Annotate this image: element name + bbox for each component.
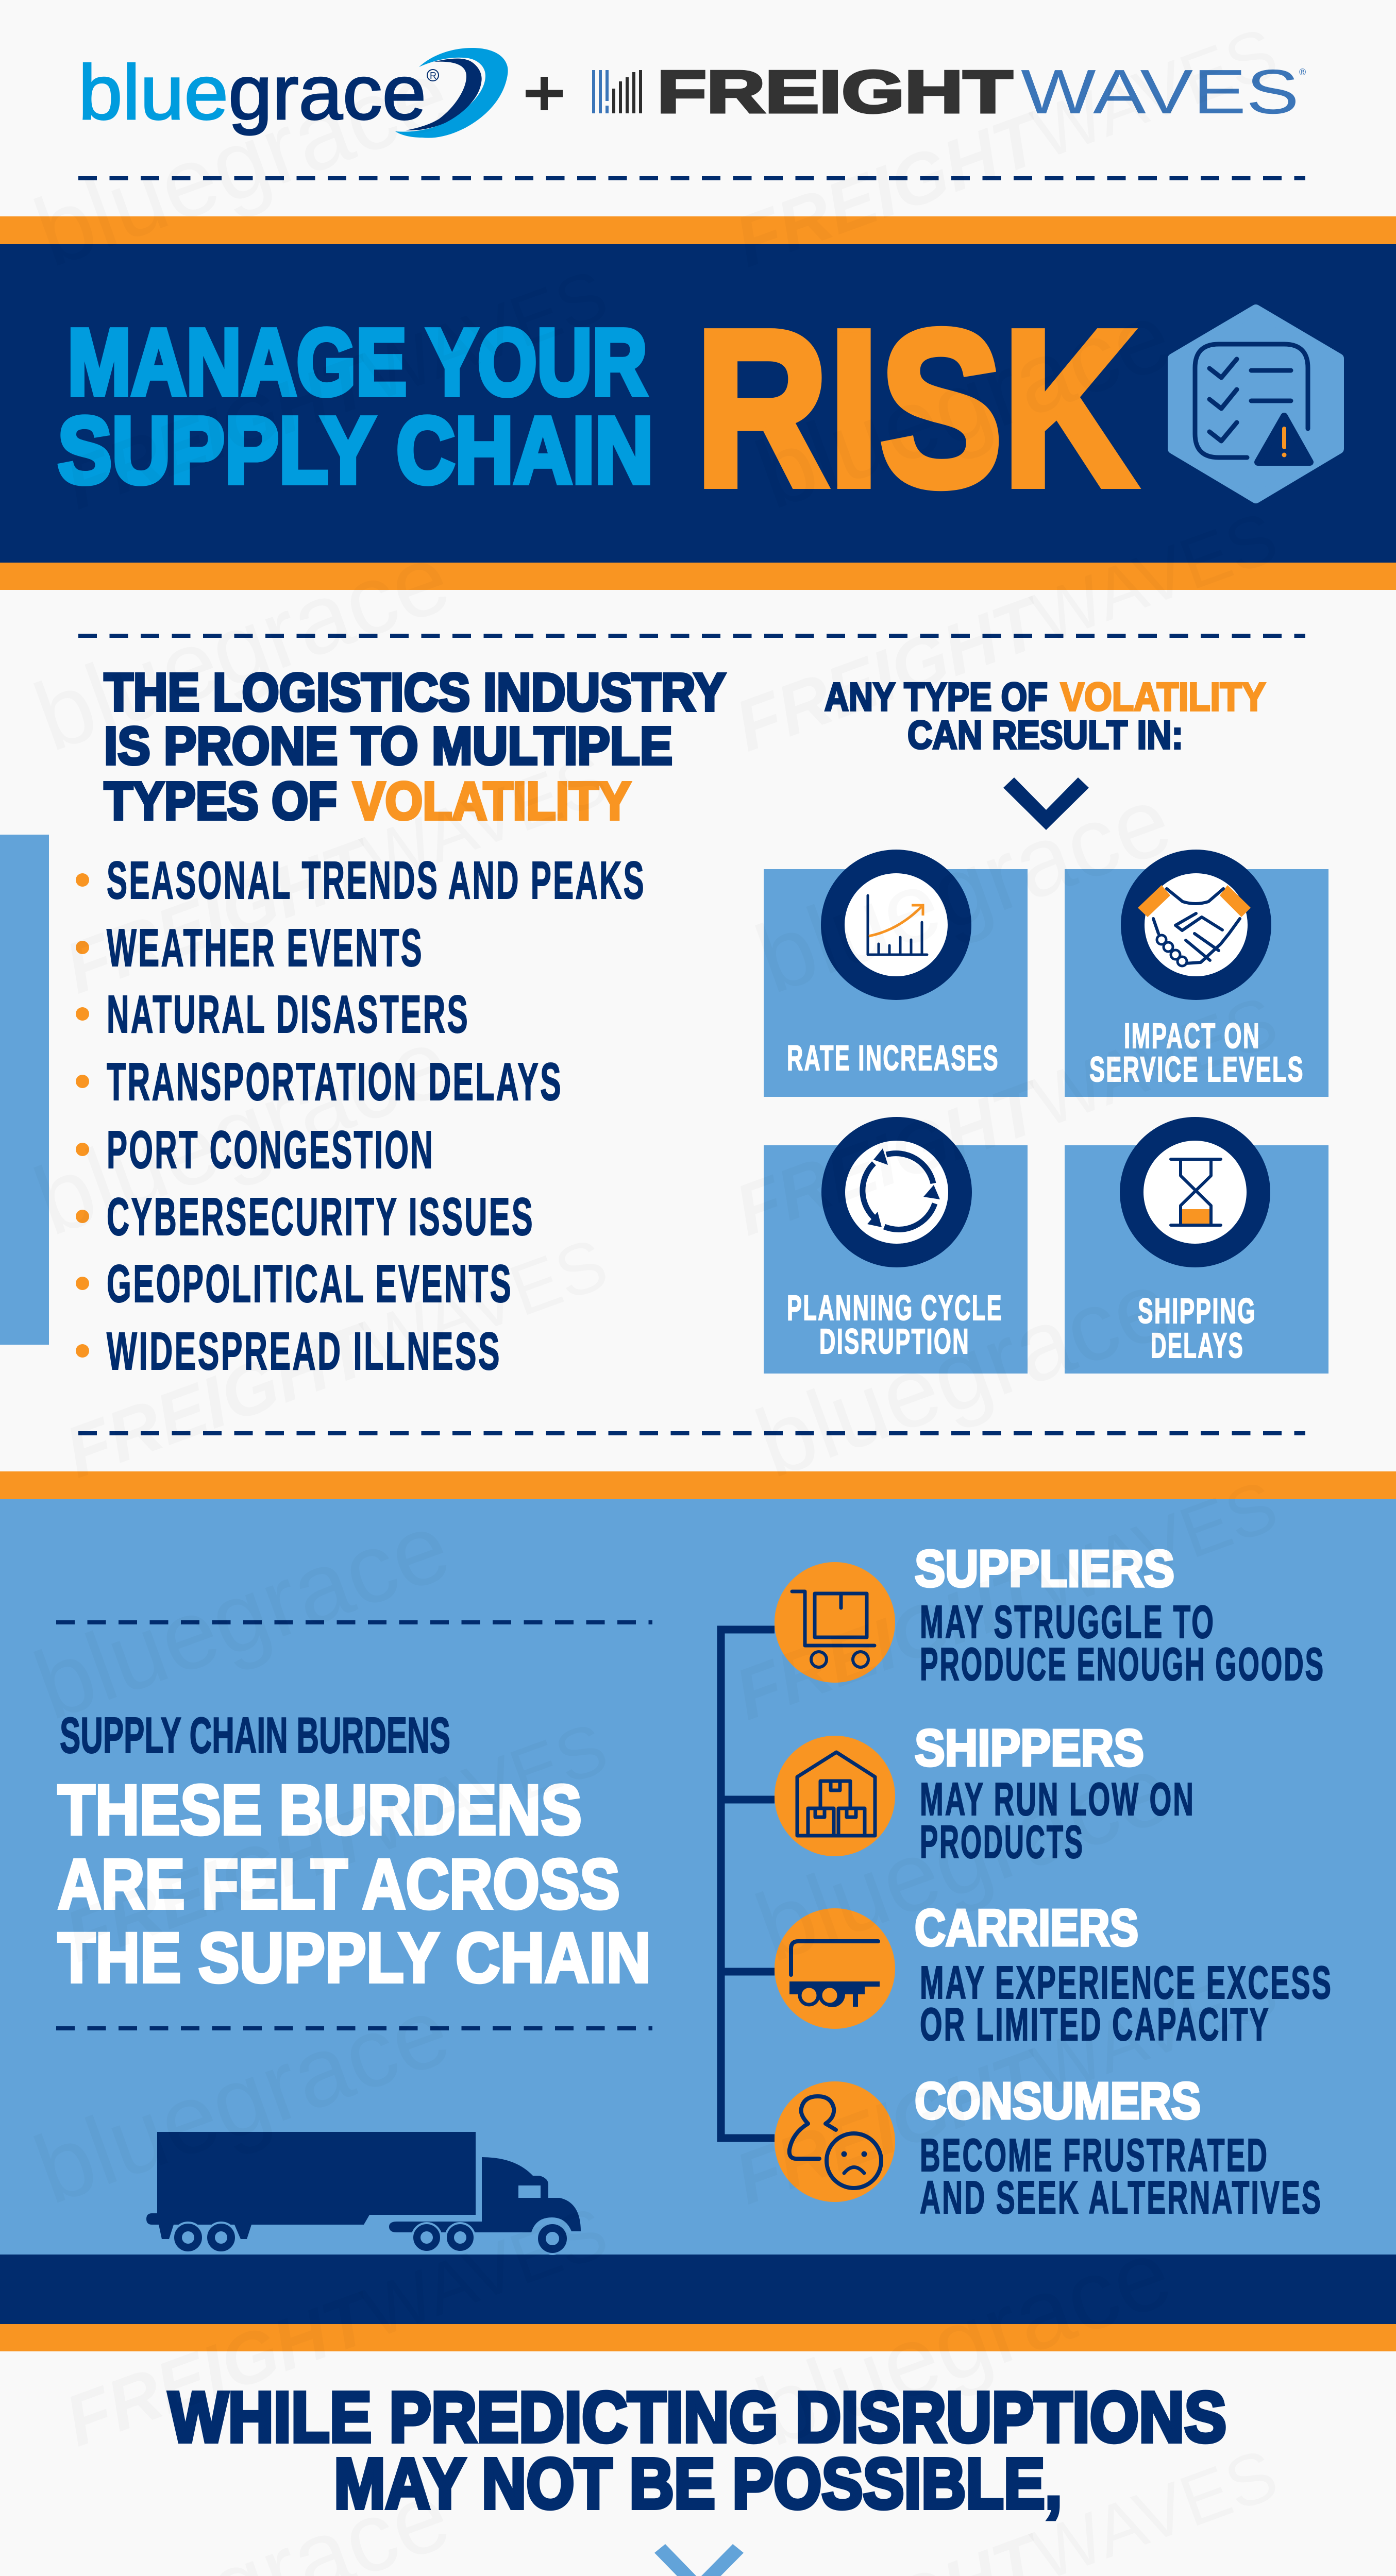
text: bluegrace [22, 1491, 463, 1741]
text: bluegrace [743, 2217, 1184, 2467]
logo: bluegrace [78, 48, 508, 138]
text: FREIGHTWAVES [55, 1223, 617, 1493]
heading: burdens felt across the chain: THESE BURDENS [58, 1771, 582, 1850]
logo: FreightWaves: WAVES [1021, 57, 1299, 127]
heading: burdens felt across the chain: THE SUPPLY CHAIN [58, 1919, 651, 1997]
row: carriers: CARRIERS [915, 1899, 1138, 1957]
title [58, 285, 1136, 532]
text: bluegrace [22, 522, 463, 772]
logo: FreightWaves: ® [1299, 67, 1306, 77]
arrow: chevron down [654, 2544, 744, 2576]
text: bluegrace [22, 38, 463, 288]
icon: truck [146, 2132, 581, 2254]
heading: any type of volatility [825, 675, 1266, 757]
volatility list: TRANSPORTATION DELAYS [107, 1052, 563, 1111]
volatility list: PORT CONGESTION [107, 1120, 434, 1179]
heading: any type of volatility: ANY TYPE OF [825, 675, 1048, 719]
logo: bluegrace: blue [78, 49, 228, 135]
heading: any type of volatility: VOLATILITY [1061, 675, 1266, 719]
panel: title banner [0, 216, 1396, 590]
card: planning cycle disruption [764, 1117, 1028, 1374]
heading: any type of volatility: CAN RESULT IN: [907, 713, 1183, 757]
plus sign [526, 77, 563, 110]
heading: logistics volatility: VOLATILITY [353, 771, 631, 831]
row: shippers: MAY RUN LOW ON [920, 1774, 1195, 1825]
title: SUPPLY CHAIN [58, 397, 653, 503]
heading: logistics volatility: TYPES OF [104, 771, 337, 831]
card: impact on service levels [1065, 850, 1328, 1097]
row: consumers: CONSUMERS [915, 2072, 1201, 2130]
row: carriers [775, 1899, 1333, 2050]
text: FREIGHTWAVES [725, 12, 1287, 282]
title: RISK [695, 285, 1136, 532]
heading: reduce risk [169, 2378, 1226, 2576]
volatility list: GEOPOLITICAL EVENTS [107, 1254, 513, 1313]
text: bluegrace [22, 1975, 463, 2225]
row: shippers: SHIPPERS [915, 1719, 1144, 1777]
row: shippers [775, 1719, 1195, 1868]
text: FREIGHTWAVES [725, 496, 1287, 767]
side accent bar [0, 835, 49, 1345]
volatility list: WIDESPREAD ILLNESS [107, 1321, 501, 1381]
row: shippers: PRODUCTS [920, 1817, 1084, 1868]
heading: logistics volatility [104, 663, 726, 831]
logo: FreightWaves: FREIGHT [657, 58, 1013, 125]
text: bluegrace [743, 280, 1184, 530]
text: FREIGHTWAVES [55, 254, 617, 524]
row: consumers [775, 2072, 1322, 2224]
text: bluegrace [743, 765, 1184, 1014]
panel: volatility types [0, 663, 1328, 1381]
card: rate increases [764, 850, 1028, 1097]
logos header [78, 48, 1306, 138]
logo: bluegrace: grace [228, 49, 426, 135]
text: FREIGHTWAVES [55, 1707, 617, 1977]
heading: logistics volatility: IS PRONE TO MULTIPLE [104, 716, 672, 775]
text: FREIGHTWAVES [55, 2191, 617, 2462]
text: FREIGHTWAVES [55, 738, 617, 1009]
heading: reduce risk: WHILE PREDICTING DISRUPTIONS [169, 2378, 1226, 2457]
text: FREIGHTWAVES [725, 1949, 1287, 2219]
heading: logistics volatility: THE LOGISTICS INDUSTRY [104, 663, 726, 722]
card: shipping delays: SHIPPING [1138, 1291, 1256, 1331]
heading: burdens felt across the chain [58, 1771, 651, 1997]
card: planning cycle disruption: DISRUPTION [819, 1321, 970, 1361]
logo: FreightWaves [592, 57, 1306, 127]
volatility list: NATURAL DISASTERS [107, 985, 469, 1044]
text: FREIGHTWAVES [725, 980, 1287, 1251]
row: suppliers: MAY STRUGGLE TO [920, 1597, 1215, 1648]
card: impact on service levels: IMPACT ON [1124, 1016, 1260, 1056]
heading: supply chain burdens: SUPPLY CHAIN BURDENS [60, 1707, 450, 1764]
text: bluegrace [743, 1733, 1184, 1983]
volatility list: SEASONAL TRENDS AND PEAKS [107, 851, 646, 910]
volatility list: CYBERSECURITY ISSUES [107, 1187, 534, 1246]
panel: supply chain burdens [0, 1471, 1396, 2351]
heading: reduce risk: MAY NOT BE POSSIBLE, [334, 2444, 1062, 2523]
card: shipping delays: DELAYS [1151, 1326, 1244, 1365]
arrow: chevron down [1003, 777, 1089, 830]
card: shipping delays [1065, 1117, 1328, 1374]
title: MANAGE YOUR [68, 309, 647, 415]
text: bluegrace [22, 1007, 463, 1257]
text: bluegrace [743, 1249, 1184, 1499]
card: planning cycle disruption: PLANNING CYCLE [787, 1288, 1003, 1328]
icon: checklist with warning hexagon [1173, 310, 1339, 498]
heading: burdens felt across the chain: ARE FELT ACROSS [58, 1845, 620, 1924]
volatility list: WEATHER EVENTS [107, 918, 424, 977]
logo: bluegrace: R [430, 71, 436, 81]
volatility list [76, 851, 646, 1381]
text: FREIGHTWAVES [725, 1465, 1287, 1735]
connector tree [721, 1630, 775, 2138]
card: rate increases: RATE INCREASES [787, 1038, 999, 1078]
row: suppliers [775, 1540, 1325, 1690]
row: suppliers: SUPPLIERS [915, 1540, 1174, 1598]
